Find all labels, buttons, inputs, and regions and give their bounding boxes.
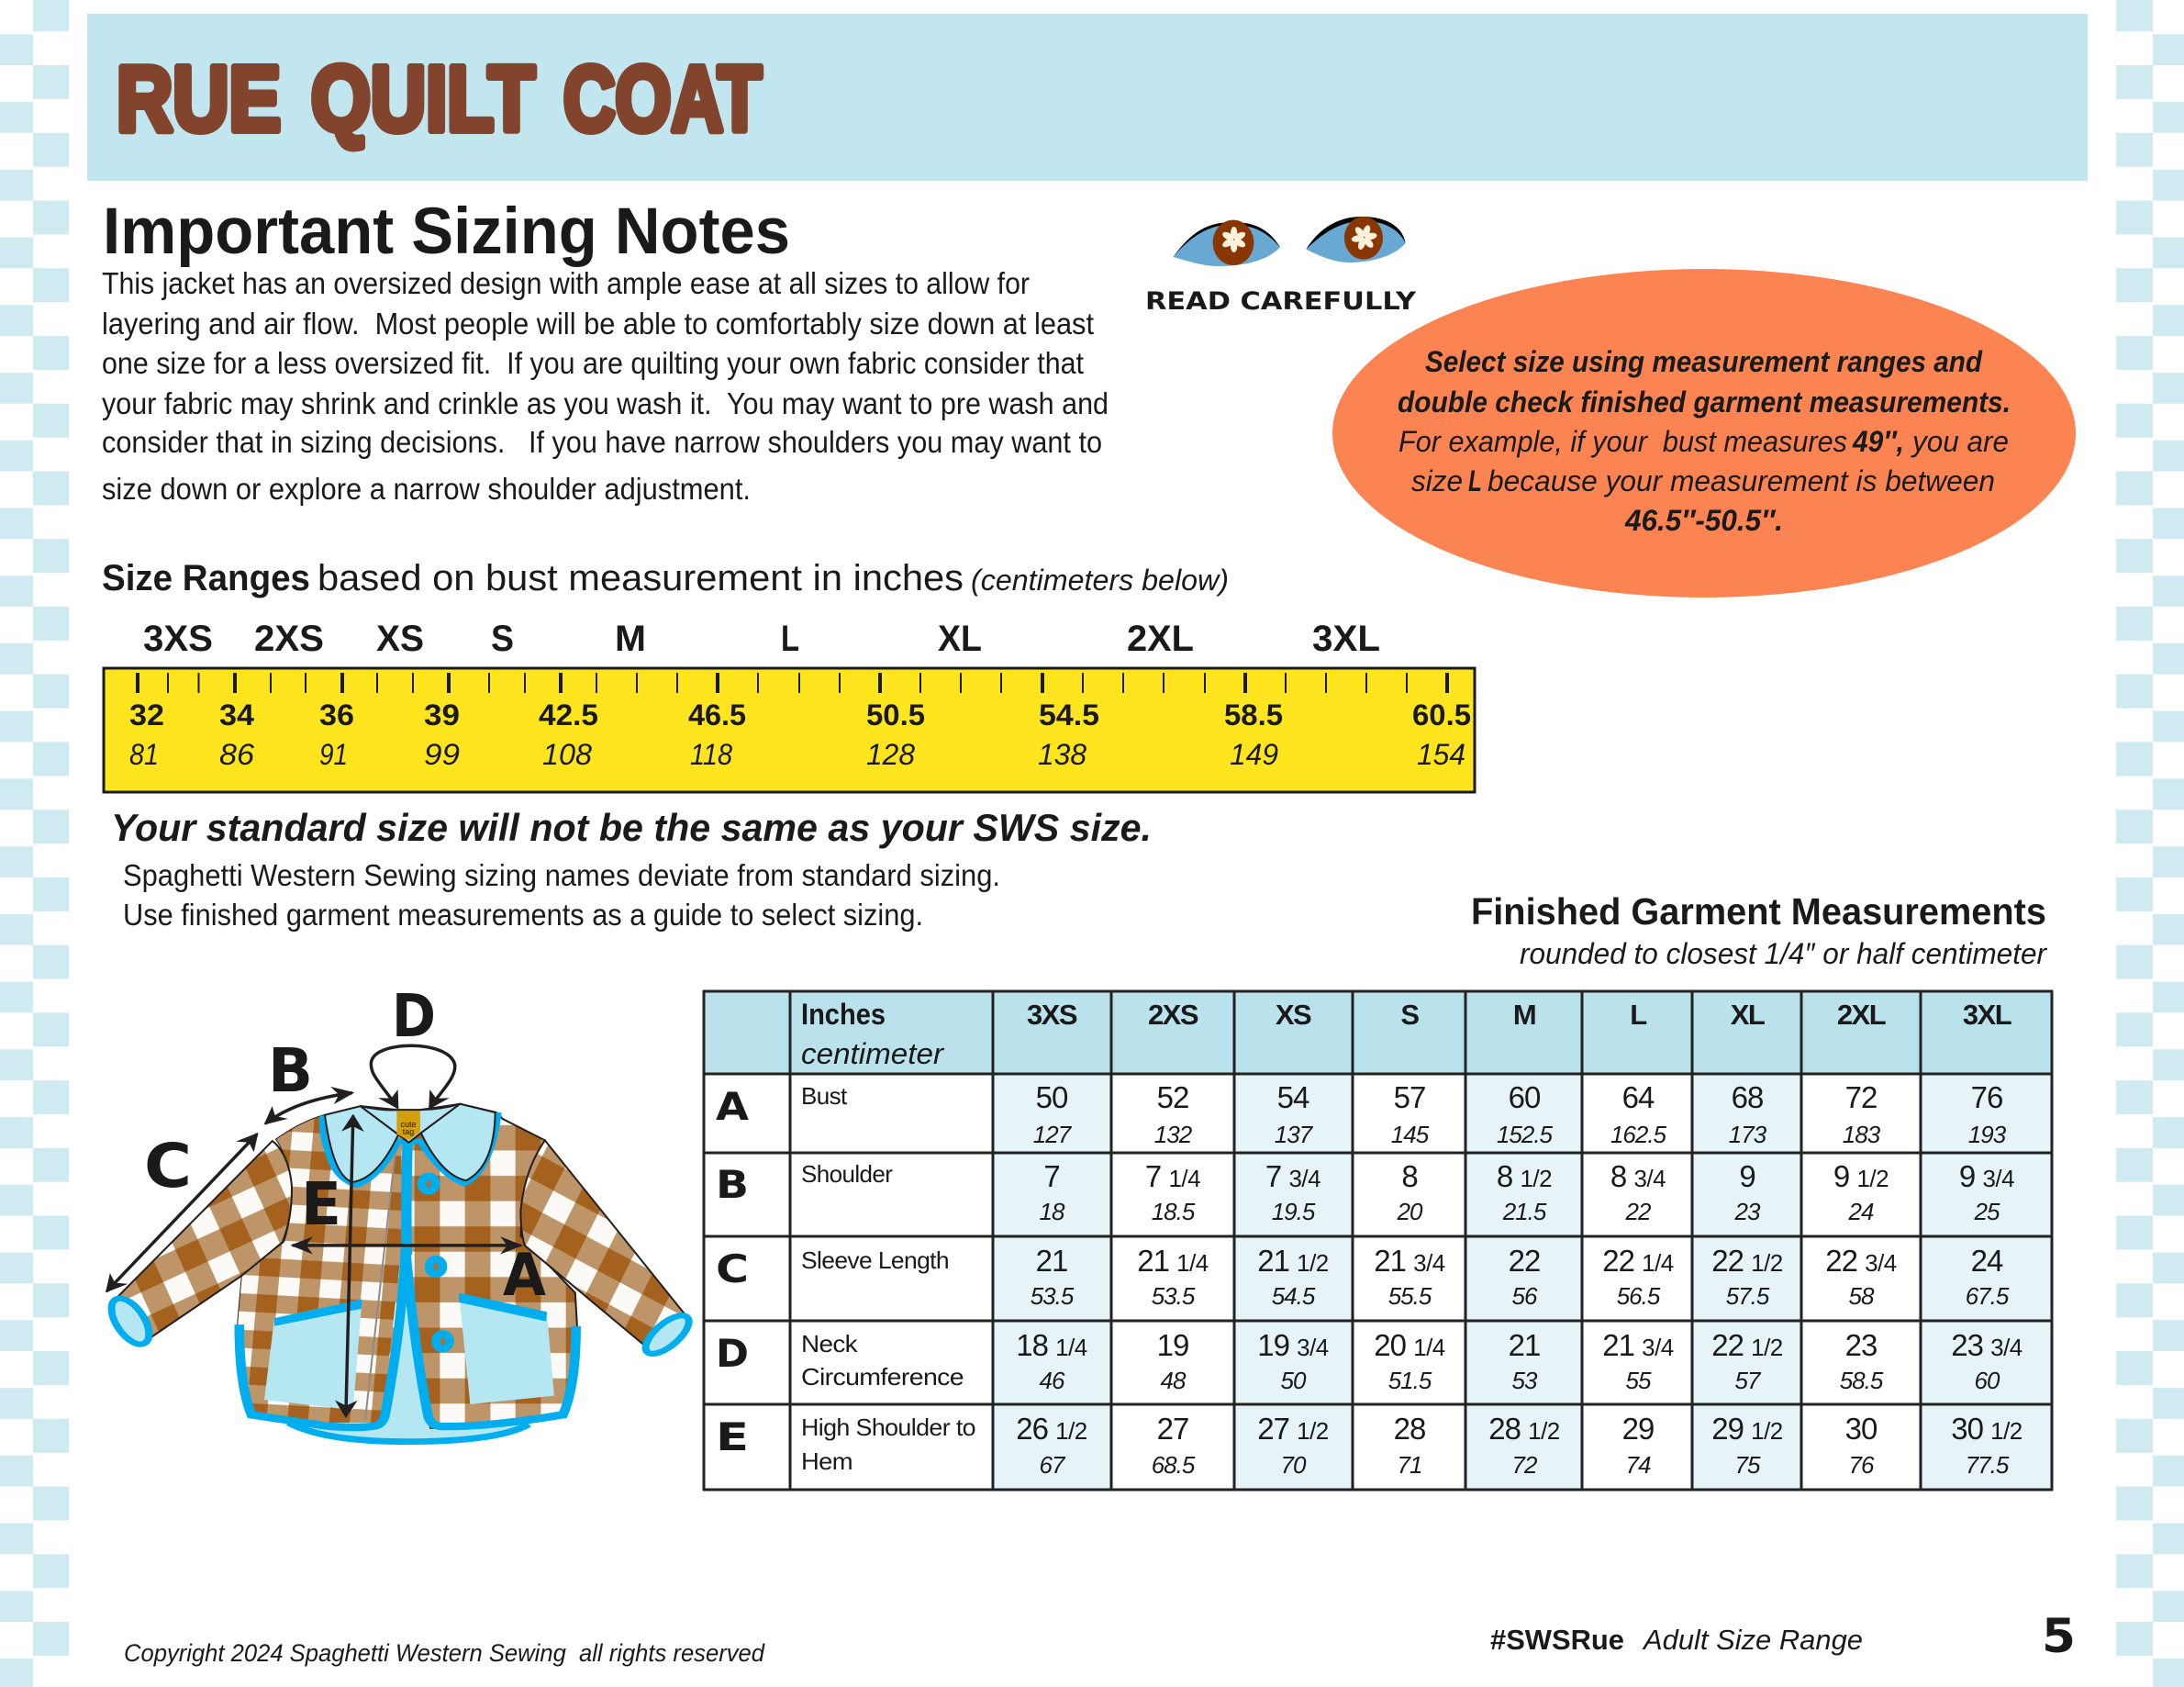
row E: high shoulder to hem: 27 bbox=[1157, 1412, 1188, 1446]
right sleeve bbox=[520, 1140, 685, 1348]
title banner bbox=[87, 14, 2088, 181]
row D: neck circumference: 19 3/4 bbox=[1257, 1328, 1329, 1362]
row E: high shoulder to hem: 77.5 bbox=[1966, 1451, 2010, 1479]
size labels above ruler: XS bbox=[376, 619, 424, 659]
row B: shoulder: 20 bbox=[1397, 1198, 1423, 1225]
row D: neck circumference: Neck bbox=[801, 1330, 859, 1357]
table header row: 3XL bbox=[1963, 999, 2011, 1031]
row E: high shoulder to hem: 29 bbox=[1622, 1412, 1654, 1446]
letter E: E bbox=[301, 1171, 341, 1239]
table header row: XS bbox=[1276, 999, 1311, 1031]
row C: sleeve length: 53.5 bbox=[1031, 1282, 1075, 1310]
row C: sleeve length: 58 bbox=[1849, 1282, 1875, 1310]
row E: high shoulder to hem: 74 bbox=[1626, 1451, 1651, 1479]
row A: bust: 68 bbox=[1732, 1080, 1763, 1114]
row D: neck circumference: 23 bbox=[1845, 1328, 1877, 1362]
row C: sleeve length: 22 1/4 bbox=[1602, 1244, 1674, 1278]
row C: sleeve length: 21 1/2 bbox=[1257, 1244, 1329, 1278]
ruler centimeter values: 118 bbox=[690, 738, 732, 771]
coat body bbox=[238, 1104, 577, 1429]
neck tag bbox=[396, 1111, 420, 1140]
back neck bbox=[361, 1104, 460, 1143]
row B: shoulder: 22 bbox=[1625, 1198, 1652, 1225]
ruler inch values: 36 bbox=[319, 698, 354, 732]
heading: finished garment measurements: rounded to closest 1/4″ or half centimeter bbox=[1520, 937, 2047, 970]
body text block: one size for a less oversized fit. If you are quilting your own fabric consider that bbox=[102, 346, 1084, 380]
row E: high shoulder to hem: High Shoulder to bbox=[801, 1413, 975, 1441]
row C: sleeve length: 22 1/2 bbox=[1711, 1244, 1783, 1278]
row C: sleeve length: C bbox=[716, 1246, 749, 1291]
body text block: size down or explore a narrow shoulder adjustment. bbox=[102, 472, 751, 506]
row C: sleeve length: 22 bbox=[1509, 1244, 1540, 1278]
ruler inch values: 46.5 bbox=[688, 698, 746, 732]
table header row: Inches bbox=[801, 998, 886, 1031]
ruler inch values: 54.5 bbox=[1039, 698, 1099, 732]
row D: neck circumference: 48 bbox=[1161, 1367, 1187, 1394]
row A: bust: 132 bbox=[1154, 1121, 1193, 1148]
icon: watching eyes bbox=[1173, 217, 1406, 266]
row D: neck circumference: 50 bbox=[1281, 1367, 1307, 1394]
row A: bust: 64 bbox=[1622, 1080, 1655, 1114]
row B: shoulder: 23 bbox=[1734, 1198, 1761, 1225]
row A: bust: Bust bbox=[801, 1082, 848, 1110]
size labels above ruler: L bbox=[781, 619, 799, 659]
heading: finished garment measurements: Finished Garment Measurements bbox=[1471, 890, 2046, 933]
row C: sleeve length: 53.5 bbox=[1152, 1282, 1196, 1310]
ruler centimeter values: 91 bbox=[319, 738, 348, 771]
row E: high shoulder to hem: 76 bbox=[1849, 1451, 1875, 1479]
ruler centimeter values: 81 bbox=[129, 738, 159, 771]
row B: shoulder: 18.5 bbox=[1152, 1198, 1196, 1225]
row A: bust: 162.5 bbox=[1610, 1121, 1667, 1148]
row C: sleeve length bbox=[716, 1244, 2010, 1310]
row C: sleeve length: 67.5 bbox=[1966, 1282, 2010, 1310]
row D: neck circumference: 18 1/4 bbox=[1016, 1328, 1087, 1362]
row B: shoulder: B bbox=[716, 1162, 749, 1207]
row B: shoulder: Shoulder bbox=[801, 1160, 893, 1188]
row E: high shoulder to hem: 72 bbox=[1512, 1451, 1538, 1479]
row E: high shoulder to hem: 75 bbox=[1735, 1451, 1761, 1479]
size labels above ruler bbox=[143, 619, 1380, 659]
letter C: C bbox=[144, 1131, 192, 1201]
title: QUILT bbox=[311, 48, 535, 151]
row D: neck circumference: 19 bbox=[1157, 1328, 1188, 1362]
read carefully label: READ CAREFULLY bbox=[1145, 287, 1416, 316]
callout: orange ellipse: because your measurement is between bbox=[1488, 464, 1995, 497]
callout: orange ellipse: Select size using measurement ranges and bbox=[1425, 345, 1983, 378]
row D: neck circumference: 60 bbox=[1975, 1367, 2000, 1394]
size labels above ruler: 2XS bbox=[254, 619, 324, 659]
row C: sleeve length: 54.5 bbox=[1272, 1282, 1316, 1310]
row B: shoulder: 21.5 bbox=[1502, 1198, 1547, 1225]
row D: neck circumference bbox=[716, 1328, 2022, 1394]
size labels above ruler: S bbox=[491, 619, 514, 659]
row B: shoulder: 7 1/4 bbox=[1145, 1159, 1200, 1193]
letter A: A bbox=[503, 1242, 546, 1310]
tinted size columns bbox=[993, 1074, 2052, 1490]
right pocket bbox=[459, 1293, 554, 1404]
arrow: D neck loop bbox=[371, 1045, 455, 1108]
row D: neck circumference: 51.5 bbox=[1388, 1367, 1432, 1394]
row B: shoulder: 9 bbox=[1739, 1159, 1755, 1193]
ruler inch values: 32 bbox=[129, 698, 164, 732]
row E: high shoulder to hem: 30 1/2 bbox=[1951, 1412, 2022, 1446]
row B: shoulder: 8 1/2 bbox=[1497, 1159, 1552, 1193]
page number: 5 bbox=[2042, 1610, 2076, 1664]
row C: sleeve length: 57.5 bbox=[1726, 1282, 1770, 1310]
heading: finished garment measurements bbox=[1471, 890, 2047, 970]
row A: bust: 193 bbox=[1968, 1121, 2007, 1148]
row B: shoulder: 8 bbox=[1401, 1159, 1418, 1193]
row C: sleeve length: 56 bbox=[1512, 1282, 1538, 1310]
callout: orange ellipse bbox=[1332, 269, 2076, 598]
row A: bust: 50 bbox=[1036, 1080, 1068, 1114]
ruler centimeter values: 99 bbox=[424, 738, 460, 771]
ruler inch values: 50.5 bbox=[866, 698, 925, 732]
size labels above ruler: 2XL bbox=[1127, 619, 1194, 659]
left cuff bbox=[104, 1294, 157, 1348]
ruler centimeter values: 149 bbox=[1230, 738, 1278, 771]
ruler centimeter values bbox=[129, 738, 1465, 771]
row D: neck circumference: 46 bbox=[1040, 1367, 1065, 1394]
left sleeve bbox=[117, 1141, 292, 1337]
left collar bbox=[325, 1106, 398, 1182]
left front panel bbox=[238, 1115, 402, 1429]
row E: high shoulder to hem: 28 bbox=[1394, 1412, 1425, 1446]
footer hashtag bbox=[1490, 1624, 1863, 1656]
buttons bbox=[422, 1176, 450, 1349]
row B: shoulder: 19.5 bbox=[1272, 1198, 1316, 1225]
front band and hem bbox=[240, 1248, 576, 1427]
heading: size ranges: based on bust measurement in inches bbox=[318, 558, 964, 598]
row D: neck circumference: 21 3/4 bbox=[1602, 1328, 1674, 1362]
sizing note text: Use finished garment measurements as a guide to select sizing. bbox=[123, 898, 923, 932]
sizing note text: Spaghetti Western Sewing sizing names deviate from standard sizing. bbox=[123, 858, 1000, 892]
callout: orange ellipse: size bbox=[1411, 464, 1463, 497]
body text block: your fabric may shrink and crinkle as you wash it. You may want to pre wash and bbox=[102, 386, 1109, 420]
heading: important sizing notes: Important Sizing Notes bbox=[103, 196, 790, 268]
ruler inch values: 39 bbox=[424, 698, 460, 732]
row C: sleeve length: 21 bbox=[1036, 1244, 1067, 1278]
row E: high shoulder to hem: Hem bbox=[801, 1447, 852, 1475]
heading: size ranges bbox=[102, 558, 1229, 598]
table header row bbox=[801, 998, 2011, 1070]
row A: bust: A bbox=[716, 1084, 750, 1129]
scalloped collar trim bbox=[322, 1112, 498, 1185]
row E: high shoulder to hem bbox=[716, 1412, 2022, 1479]
row D: neck circumference: 21 bbox=[1509, 1328, 1540, 1362]
size labels above ruler: M bbox=[615, 619, 646, 659]
letter B: B bbox=[268, 1035, 313, 1106]
row E: high shoulder to hem: 71 bbox=[1398, 1451, 1421, 1479]
row A: bust: 173 bbox=[1729, 1121, 1767, 1148]
row E: high shoulder to hem: 30 bbox=[1845, 1412, 1878, 1446]
ruler inch values: 42.5 bbox=[539, 698, 598, 732]
body text block: layering and air flow. Most people will be able to comfortably size down at least bbox=[102, 307, 1094, 341]
callout: orange ellipse: double check finished garment measurements. bbox=[1398, 385, 2011, 419]
row A: bust: 52 bbox=[1157, 1080, 1188, 1114]
heading: size ranges: Size Ranges bbox=[102, 558, 310, 598]
title: RUE bbox=[117, 48, 281, 151]
row B: shoulder: 7 3/4 bbox=[1265, 1159, 1320, 1193]
table header row: M bbox=[1513, 999, 1535, 1031]
row C: sleeve length: 21 1/4 bbox=[1137, 1244, 1209, 1278]
body text block: This jacket has an oversized design with ample ease at all sizes to allow for bbox=[102, 266, 1030, 300]
callout: orange ellipse: For example, if your bust measures bbox=[1398, 425, 1847, 458]
tag text bbox=[400, 1120, 417, 1136]
body text block bbox=[102, 266, 1109, 506]
row B: shoulder: 7 bbox=[1043, 1159, 1060, 1193]
table header row: centimeter bbox=[801, 1037, 944, 1070]
row A: bust: 60 bbox=[1509, 1080, 1541, 1114]
table header row: L bbox=[1630, 999, 1646, 1031]
coat drawing bbox=[104, 1045, 696, 1442]
row B: shoulder: 24 bbox=[1848, 1198, 1874, 1225]
callout: orange ellipse: you are bbox=[1911, 425, 2009, 458]
row D: neck circumference: 22 1/2 bbox=[1711, 1328, 1783, 1362]
ruler centimeter values: 138 bbox=[1038, 738, 1086, 771]
row C: sleeve length: 55.5 bbox=[1388, 1282, 1432, 1310]
callout: orange ellipse: 49″, bbox=[1852, 425, 1904, 458]
table header row: 2XL bbox=[1837, 999, 1886, 1031]
row E: high shoulder to hem: 67 bbox=[1040, 1451, 1066, 1479]
footer hashtag: Adult Size Range bbox=[1642, 1624, 1863, 1656]
measurements table bbox=[703, 990, 2053, 1491]
arrow: C sleeve bbox=[106, 1134, 257, 1291]
body text block: consider that in sizing decisions. If you have narrow shoulders you may want to bbox=[102, 425, 1102, 459]
coat illustration bbox=[104, 983, 696, 1442]
title: COAT bbox=[563, 48, 762, 151]
heading: size ranges: (centimeters below) bbox=[971, 564, 1229, 597]
right collar bbox=[421, 1104, 496, 1180]
table header row: XL bbox=[1731, 999, 1765, 1031]
sizing note text bbox=[123, 858, 1000, 932]
row C: sleeve length: 56.5 bbox=[1617, 1282, 1661, 1310]
row A: bust: 145 bbox=[1391, 1121, 1430, 1148]
row D: neck circumference: 58.5 bbox=[1840, 1367, 1884, 1394]
ruler centimeter values: 154 bbox=[1417, 738, 1465, 771]
arrow: E length bbox=[346, 1116, 353, 1416]
row E: high shoulder to hem: 28 1/2 bbox=[1488, 1412, 1560, 1446]
row D: neck circumference: 57 bbox=[1735, 1367, 1762, 1394]
row B: shoulder: 9 3/4 bbox=[1959, 1159, 2014, 1193]
row E: high shoulder to hem: 68.5 bbox=[1152, 1451, 1196, 1479]
ruler inch values: 60.5 bbox=[1412, 698, 1471, 732]
under layer bbox=[288, 1287, 529, 1441]
left checkerboard border bbox=[0, 0, 69, 1687]
tag text: cute bbox=[400, 1120, 417, 1129]
row C: sleeve length: 24 bbox=[1971, 1244, 2003, 1278]
size labels above ruler: 3XS bbox=[143, 619, 213, 659]
row C: sleeve length: Sleeve Length bbox=[801, 1246, 949, 1274]
title bbox=[117, 48, 762, 151]
row C: sleeve length: 22 3/4 bbox=[1825, 1244, 1897, 1278]
ruler inch values bbox=[129, 698, 1471, 732]
table header row: S bbox=[1400, 999, 1419, 1031]
row B: shoulder: 25 bbox=[1974, 1198, 2000, 1225]
row D: neck circumference: 55 bbox=[1626, 1367, 1652, 1394]
row D: neck circumference: Circumference bbox=[801, 1363, 964, 1391]
row A: bust: 137 bbox=[1275, 1121, 1314, 1148]
row D: neck circumference: 20 1/4 bbox=[1374, 1328, 1445, 1362]
ruler centimeter values: 128 bbox=[866, 738, 915, 771]
row A: bust: 152.5 bbox=[1497, 1121, 1554, 1148]
callout: orange ellipse: L bbox=[1468, 464, 1482, 497]
row B: shoulder: 9 1/2 bbox=[1833, 1159, 1889, 1193]
row A: bust bbox=[716, 1080, 2007, 1148]
row E: high shoulder to hem: E bbox=[716, 1414, 749, 1459]
row A: bust: 76 bbox=[1971, 1080, 2002, 1114]
table header fill bbox=[704, 991, 2052, 1074]
footer hashtag: #SWSRue bbox=[1490, 1624, 1624, 1656]
row E: high shoulder to hem: 70 bbox=[1281, 1451, 1307, 1479]
row A: bust: 72 bbox=[1845, 1080, 1877, 1114]
size labels above ruler: XL bbox=[938, 619, 982, 659]
left pocket bbox=[264, 1299, 362, 1410]
row B: shoulder: 18 bbox=[1040, 1198, 1065, 1225]
right cuff bbox=[638, 1310, 696, 1359]
tag text: tag bbox=[403, 1127, 414, 1136]
row D: neck circumference: 53 bbox=[1512, 1367, 1538, 1394]
ruler centimeter values: 108 bbox=[542, 738, 592, 771]
footer copyright: Copyright 2024 Spaghetti Western Sewing all rights reserved bbox=[124, 1639, 765, 1667]
row E: high shoulder to hem: 29 1/2 bbox=[1711, 1412, 1783, 1446]
ruler inch values: 34 bbox=[219, 698, 254, 732]
row B: shoulder bbox=[716, 1159, 2014, 1225]
row E: high shoulder to hem: 27 1/2 bbox=[1257, 1412, 1329, 1446]
right checkerboard border bbox=[2116, 0, 2184, 1687]
ruler inch values: 58.5 bbox=[1224, 698, 1283, 732]
letter D: D bbox=[392, 983, 436, 1051]
yellow measuring ruler bbox=[104, 668, 1475, 792]
callout: orange ellipse: 46.5″-50.5″. bbox=[1624, 504, 1783, 537]
table header row: 3XS bbox=[1027, 999, 1077, 1031]
row E: high shoulder to hem: 26 1/2 bbox=[1016, 1412, 1087, 1446]
warning heading: Your standard size will not be the same as your SWS size. bbox=[111, 806, 1152, 849]
row A: bust: 54 bbox=[1277, 1080, 1309, 1114]
table header row: 2XS bbox=[1148, 999, 1198, 1031]
row C: sleeve length: 21 3/4 bbox=[1374, 1244, 1445, 1278]
ruler centimeter values: 86 bbox=[219, 738, 254, 771]
row A: bust: 183 bbox=[1843, 1121, 1881, 1148]
size labels above ruler: 3XL bbox=[1312, 619, 1380, 659]
row B: shoulder: 8 3/4 bbox=[1610, 1159, 1666, 1193]
row A: bust: 57 bbox=[1394, 1080, 1425, 1114]
row D: neck circumference: D bbox=[716, 1331, 749, 1376]
arrow: A bust bbox=[293, 1244, 520, 1247]
row A: bust: 127 bbox=[1033, 1121, 1073, 1148]
row D: neck circumference: 23 3/4 bbox=[1951, 1328, 2022, 1362]
arrow: B shoulder bbox=[265, 1093, 352, 1123]
